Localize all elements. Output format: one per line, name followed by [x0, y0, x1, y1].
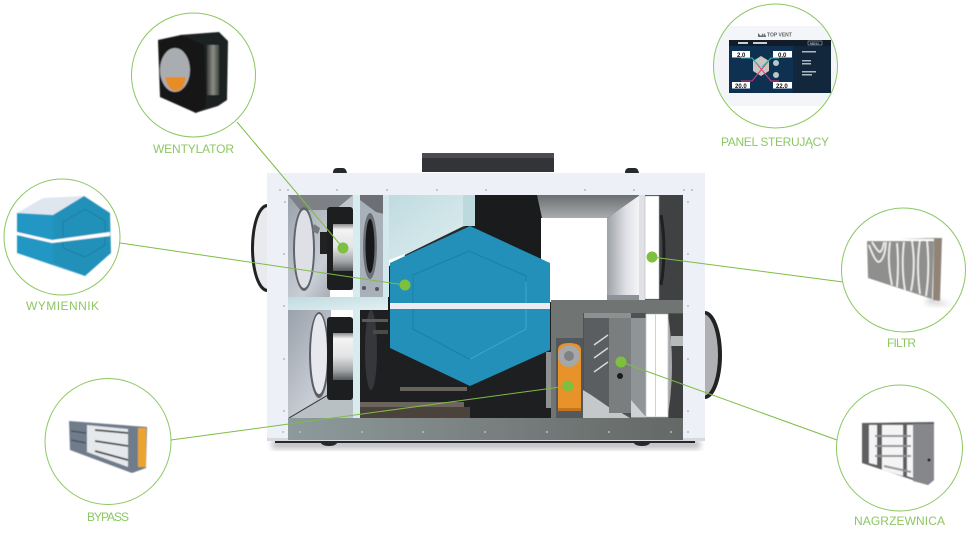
structural posts [353, 195, 360, 418]
upper fan [312, 207, 353, 290]
lower fan [327, 317, 353, 400]
bottom strip [288, 418, 683, 440]
callout: wymiennik [4, 179, 120, 313]
icon: control panel [714, 26, 837, 106]
right duct collar [688, 311, 722, 399]
icon: control panel: MENU [810, 42, 819, 46]
heat exchanger hexagon [390, 226, 550, 386]
upper left fan chamber [288, 195, 353, 297]
top service box [422, 153, 554, 172]
bypass actuator [556, 338, 583, 418]
icon: heater [862, 422, 934, 485]
interior background [288, 195, 683, 418]
icon: exchanger [17, 196, 111, 276]
heater module [584, 313, 631, 413]
lower left fan chamber [288, 310, 353, 418]
upper filter chamber [607, 195, 683, 300]
icon: filter [867, 238, 952, 306]
callout: wentylator [132, 13, 256, 156]
icon: control panel: 0.0 [778, 53, 787, 59]
icon: control panel: 22.0 [776, 84, 788, 90]
callout: bypass [45, 378, 171, 524]
casing frame [267, 173, 705, 441]
left duct collar [251, 204, 283, 292]
screws [279, 189, 693, 433]
upper centre opening [475, 195, 640, 305]
second filter [646, 314, 668, 417]
icon: control panel: 2.0 [737, 53, 746, 59]
heat recovery unit [251, 153, 722, 449]
label: wymiennik: WYMIENNIK [26, 299, 99, 313]
callout: panel sterujacy [713, 4, 838, 148]
panel circle outline [714, 4, 838, 128]
label: filtr: FILTR [887, 336, 916, 350]
upper small chamber [360, 195, 384, 297]
label: bypass: BYPASS [87, 510, 129, 524]
callout: filtr [842, 208, 966, 350]
label: nagrzewnica: NAGRZEWNICA [854, 514, 945, 528]
connector lines [120, 122, 843, 440]
icon: fan [158, 32, 228, 113]
callout: nagrzewnica [836, 385, 962, 528]
lower small chamber and foam [360, 310, 552, 418]
icon: bypass damper [69, 421, 147, 473]
pale exchanger cover [389, 195, 475, 266]
label: panel sterujacy: PANEL STERUJĄCY [721, 135, 829, 149]
marker dots [338, 242, 658, 392]
mounting brackets [320, 168, 651, 446]
label: wentylator: WENTYLATOR [153, 142, 234, 156]
lower right service bay [551, 300, 683, 418]
icon: control panel: 20.0 [735, 84, 747, 90]
unit shadow [272, 440, 700, 449]
icon: control panel: TOP VENT [767, 32, 792, 38]
